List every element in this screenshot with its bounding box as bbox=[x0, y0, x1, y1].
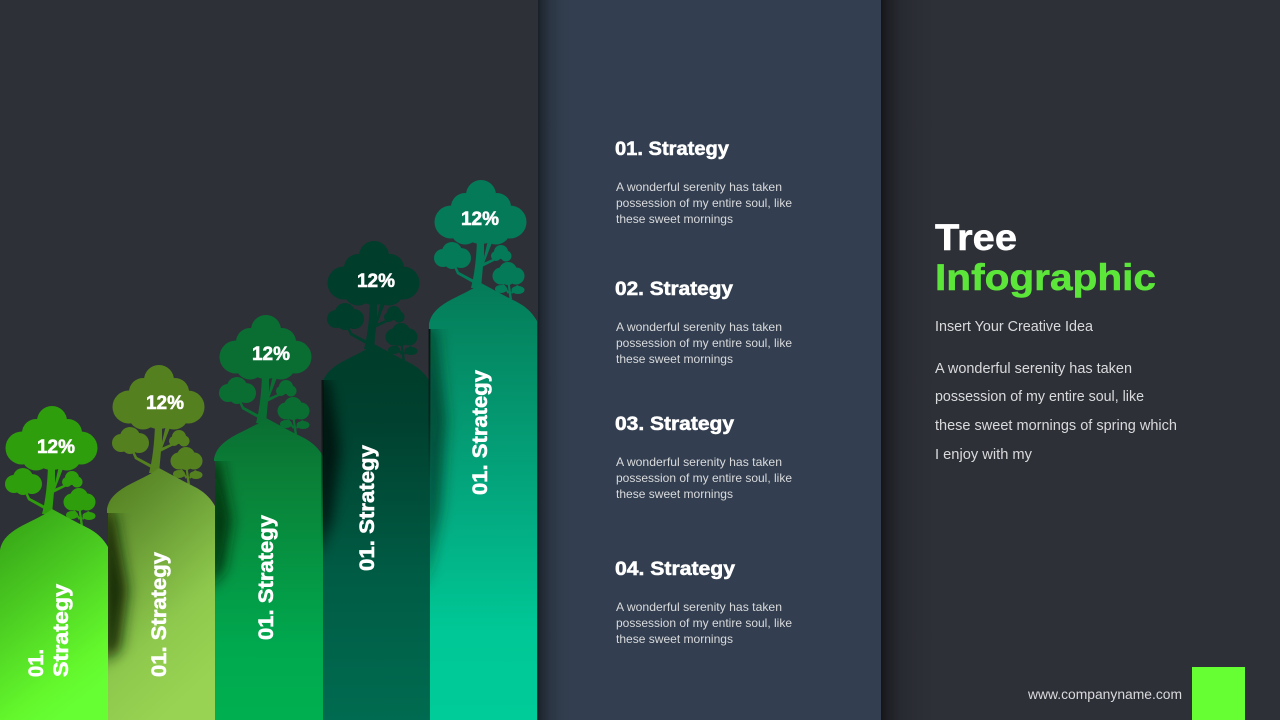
description: I enjoy with my bbox=[935, 447, 1033, 463]
bar 1 with tree: Strategy bbox=[50, 584, 73, 677]
title: Infographic bbox=[935, 257, 1156, 298]
bar 1 with tree: 12% bbox=[37, 436, 75, 458]
strategy 01: 01. Strategy bbox=[615, 138, 729, 160]
website: www.companyname.com bbox=[1027, 687, 1182, 702]
bar 3 with tree: 01. Strategy bbox=[255, 515, 278, 640]
strategy 03 bbox=[615, 413, 792, 501]
strategy 04 bbox=[615, 558, 792, 646]
strategy 03: A wonderful serenity has taken bbox=[616, 455, 782, 469]
strategy 04: A wonderful serenity has taken bbox=[616, 600, 782, 614]
strategy 04: these sweet mornings bbox=[616, 632, 733, 646]
strategy 03: these sweet mornings bbox=[616, 487, 733, 501]
description: A wonderful serenity has taken bbox=[935, 361, 1132, 377]
description: possession of my entire soul, like bbox=[935, 389, 1144, 405]
panel shadow bbox=[881, 0, 937, 720]
bar 5 with tree: 12% bbox=[461, 208, 499, 230]
strategy 04: possession of my entire soul, like bbox=[616, 616, 792, 630]
bar 4 with tree bbox=[316, 241, 430, 720]
strategy 01 bbox=[615, 138, 792, 226]
description bbox=[935, 361, 1177, 463]
bar 3 with tree bbox=[208, 315, 323, 720]
bar 3 with tree: 12% bbox=[252, 343, 290, 365]
strategy 01: these sweet mornings bbox=[616, 212, 733, 226]
strategy 02 bbox=[615, 278, 792, 366]
description: these sweet mornings of spring which bbox=[935, 418, 1177, 434]
bar 2 with tree bbox=[102, 365, 215, 720]
title bbox=[935, 217, 1156, 298]
title: Tree bbox=[935, 217, 1017, 258]
bar 2 with tree: 12% bbox=[146, 392, 184, 414]
strategy 02: A wonderful serenity has taken bbox=[616, 320, 782, 334]
strategy 02: 02. Strategy bbox=[615, 278, 733, 300]
bar 4 with tree: 12% bbox=[357, 270, 395, 292]
bar 5 with tree bbox=[424, 180, 537, 720]
strategy 01: A wonderful serenity has taken bbox=[616, 180, 782, 194]
strategy 01: possession of my entire soul, like bbox=[616, 196, 792, 210]
bar 2 with tree: 01. Strategy bbox=[148, 552, 171, 677]
green accent square bbox=[1192, 667, 1245, 720]
tree bar chart bbox=[0, 180, 537, 720]
strategy 03: possession of my entire soul, like bbox=[616, 471, 792, 485]
bar 5 with tree: 01. Strategy bbox=[469, 370, 492, 495]
strategy 02: these sweet mornings bbox=[616, 352, 733, 366]
strategy 03: 03. Strategy bbox=[615, 413, 734, 435]
bar 1 with tree: 01. bbox=[25, 649, 48, 677]
panel: strategy list bbox=[538, 0, 881, 720]
strategy 02: possession of my entire soul, like bbox=[616, 336, 792, 350]
bar 1 with tree bbox=[0, 406, 108, 720]
strategy 04: 04. Strategy bbox=[615, 558, 735, 580]
bar 4 with tree: 01. Strategy bbox=[356, 445, 379, 571]
subtitle: Insert Your Creative Idea bbox=[935, 319, 1094, 335]
